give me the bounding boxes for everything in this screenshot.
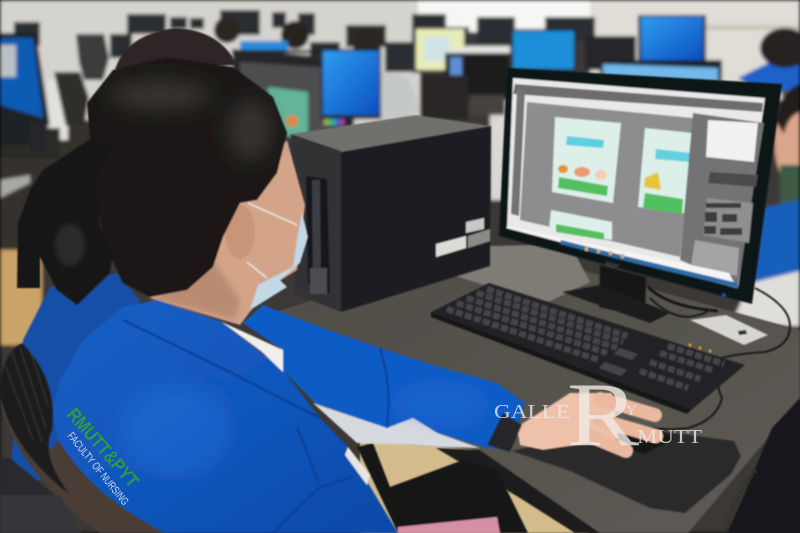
monitor logo: acer (605, 260, 620, 270)
rear tower (445, 53, 509, 100)
centre rear monitor with editing software (232, 49, 354, 139)
computer mouse (602, 428, 674, 454)
wrist band (487, 413, 522, 452)
jacket sleeve (243, 305, 525, 450)
background chairs (76, 34, 109, 80)
sleeve stripe (313, 403, 480, 448)
student (17, 57, 674, 533)
canvas (520, 102, 693, 257)
jacket embroidery: RMUTT&PYT (62, 405, 143, 492)
ear (225, 205, 255, 259)
watermark: GALLERY RMUTT: Y (626, 403, 637, 419)
jacket embroidery: FACULTY OF NURSING (65, 430, 131, 508)
watermark: GALLERY RMUTT (494, 364, 702, 465)
watermark: GALLERY RMUTT: GALLE (494, 401, 570, 423)
floor (360, 440, 590, 533)
right panels (680, 113, 764, 285)
right background student (738, 63, 800, 93)
face mask (250, 212, 308, 310)
left foreground monitor (0, 33, 50, 145)
mouse pad (512, 426, 741, 513)
keyboard (431, 283, 745, 414)
desk surface (275, 244, 800, 533)
computer tower on desk (291, 115, 491, 312)
person behind student: shoulder and hair (8, 28, 237, 495)
jacket body (52, 300, 398, 533)
neck and face (150, 140, 305, 325)
artboard 1 (552, 117, 621, 203)
monitor stand (562, 265, 670, 323)
hair sheen (110, 79, 272, 160)
black bag bottom right (725, 398, 800, 533)
inner white strap (345, 447, 370, 485)
office chair back (0, 343, 165, 533)
hair (87, 57, 287, 297)
blue rear monitors (511, 29, 576, 71)
hand on mouse (517, 393, 656, 451)
monitor bezel (499, 68, 782, 304)
watermark: GALLERY RMUTT: R (567, 364, 639, 465)
taskbar (506, 226, 737, 288)
monitor screen (506, 78, 765, 288)
neck shadow (150, 262, 240, 320)
hair bow (17, 137, 113, 305)
jacket soft shading (120, 385, 480, 475)
background people (214, 17, 240, 43)
lapel and seams (123, 320, 388, 533)
rear monitors row (14, 10, 595, 72)
white collar (222, 322, 283, 372)
watermark: GALLERY RMUTT: MUTT (637, 426, 702, 448)
bright rear monitor (413, 27, 469, 73)
blue monitor beside centre (321, 49, 381, 119)
main monitor (499, 68, 782, 323)
student's legs and phone case (357, 443, 528, 533)
mask straps (247, 203, 297, 278)
artboard 3 (549, 210, 612, 240)
paper and cables on desk (628, 287, 790, 429)
artboard 2 (638, 128, 692, 214)
